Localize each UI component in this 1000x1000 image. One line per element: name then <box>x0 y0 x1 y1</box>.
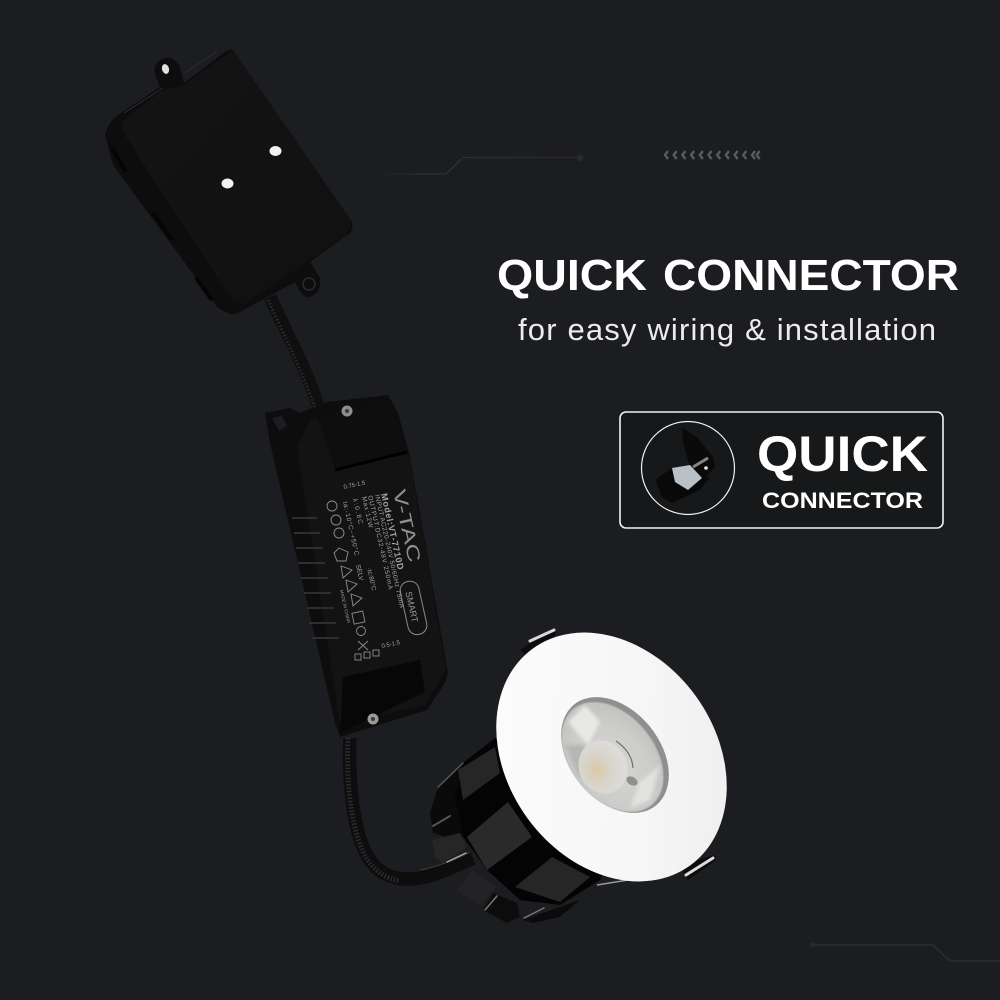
chevron row <box>665 151 760 159</box>
white bezel <box>449 587 774 927</box>
rear flanges <box>430 764 470 842</box>
badge text: QUICK <box>757 426 928 482</box>
certification icons <box>327 501 379 660</box>
lens recess <box>539 676 691 834</box>
smart badge: SMART <box>403 591 420 624</box>
label print: ta:-10°C~+50°C <box>341 501 361 556</box>
glossy highlights <box>433 763 544 918</box>
cable: lower <box>348 738 473 881</box>
label print: λ:0.8C <box>351 498 364 525</box>
heading <box>497 251 959 300</box>
screws <box>342 406 378 724</box>
label print: MADE IN CHINA <box>339 589 351 623</box>
heading: QUICK <box>497 251 647 300</box>
vent ribs <box>292 518 339 638</box>
LED dome <box>570 733 636 801</box>
spring clips <box>520 628 716 885</box>
indicator holes <box>222 146 282 188</box>
recessed light <box>430 587 774 927</box>
drum panels <box>458 747 500 800</box>
label print: OUTPUT:DC32-48V 250mA <box>366 495 394 591</box>
icon: connector <box>642 422 734 514</box>
label print: ·tc:80°C <box>365 567 378 592</box>
label print: V-TAC <box>389 488 425 564</box>
label print: 0.75-1.5 <box>343 480 367 491</box>
label print: SELV <box>354 564 365 582</box>
badge: quick connector <box>620 412 943 528</box>
label print: Model:VT-7710D <box>379 492 406 571</box>
cable: upper <box>268 297 319 408</box>
drum <box>455 738 640 905</box>
badge text: CONNECTOR <box>762 488 923 513</box>
LED driver <box>265 395 448 737</box>
label print: INPUT:AC220-240V 50/60Hz 75mA <box>373 494 405 609</box>
smart badge <box>398 579 429 636</box>
lens facets <box>565 705 660 808</box>
decorative circuit line top <box>377 155 583 174</box>
label print: Max:12W <box>360 496 374 530</box>
decorative circuit line bottom right <box>810 942 1000 961</box>
subheading: for easy wiring & installation <box>518 312 936 347</box>
label print <box>339 480 425 650</box>
label print: 0.5-1.5 <box>381 640 401 650</box>
housing <box>430 738 640 923</box>
badge text <box>757 426 928 513</box>
heading: CONNECTOR <box>663 251 959 300</box>
lens <box>541 682 684 832</box>
junction box <box>105 50 352 314</box>
